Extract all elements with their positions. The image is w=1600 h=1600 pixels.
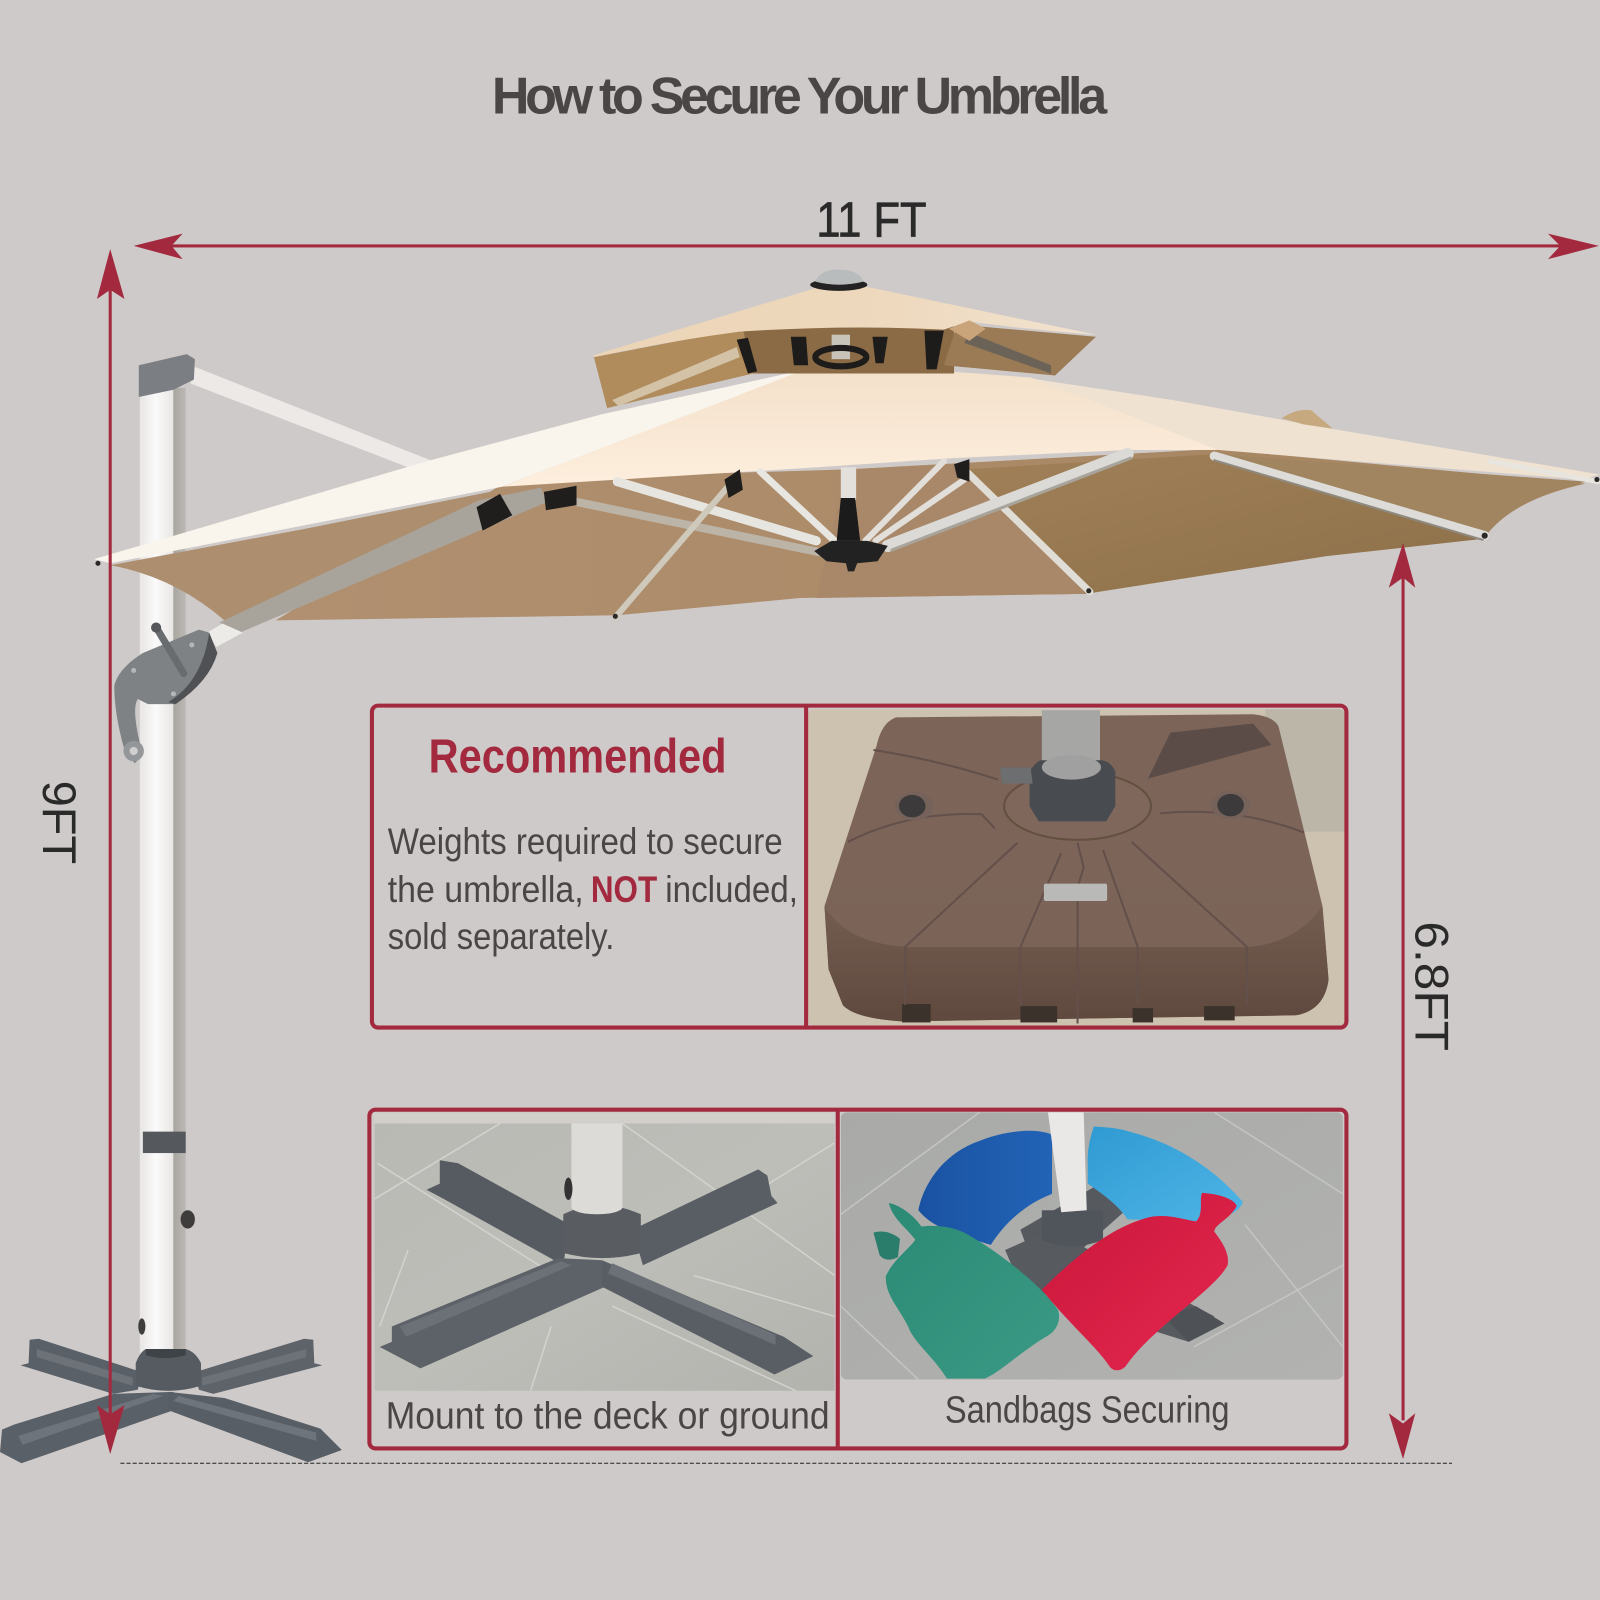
central hub bbox=[814, 467, 888, 571]
dimension: height arrow bbox=[97, 249, 124, 1454]
dimension: clearance arrow bbox=[1389, 543, 1415, 1459]
pole bbox=[140, 388, 186, 1355]
panel outline bbox=[369, 1110, 1346, 1448]
tilt crank gearbox bbox=[114, 622, 217, 763]
label: 9FT: 9FT bbox=[33, 781, 85, 864]
heading: recommended: Recommended bbox=[429, 730, 727, 783]
umbrella illustration bbox=[0, 269, 1600, 1463]
hinges bbox=[477, 459, 969, 531]
support strut bbox=[191, 365, 431, 467]
text: weights note: the umbrella, bbox=[388, 869, 584, 910]
panel: mounting options bbox=[369, 1109, 1346, 1449]
photo: sandbags bbox=[841, 1112, 1343, 1380]
photo: weight base bbox=[808, 709, 1345, 1026]
cross base bbox=[0, 1339, 342, 1463]
top crown bbox=[810, 269, 867, 291]
text: weights note: Weights required to secure bbox=[388, 821, 783, 862]
pole band bbox=[143, 1132, 186, 1153]
text: weights note: sold separately. bbox=[388, 916, 614, 957]
canopy underside bbox=[110, 449, 1586, 620]
title: How to Secure Your Umbrella bbox=[492, 67, 1108, 125]
ribs and stretchers bbox=[567, 454, 1598, 617]
caption: sandbags: Sandbags Securing bbox=[945, 1388, 1230, 1430]
label: 11 FT: 11 FT bbox=[816, 194, 927, 248]
pole knobs bbox=[138, 1210, 195, 1335]
text: weights note: NOT bbox=[591, 869, 658, 910]
panel outline bbox=[372, 706, 1346, 1028]
photo: deck mount bbox=[374, 1113, 835, 1391]
text: weights note bbox=[388, 821, 798, 957]
ground line bbox=[120, 1462, 1452, 1464]
rib tips bbox=[95, 477, 1599, 619]
caption: mount: Mount to the deck or ground bbox=[386, 1395, 830, 1437]
vent handle bbox=[1282, 410, 1333, 429]
upper canopy tier bbox=[594, 287, 1096, 408]
panel: recommended weights bbox=[372, 705, 1346, 1028]
pole top cap bbox=[139, 354, 195, 397]
text: weights note: included, bbox=[665, 869, 798, 910]
label: 6.8FT: 6.8FT bbox=[1405, 921, 1457, 1051]
dimension: width arrow bbox=[134, 234, 1599, 259]
canopy top surface bbox=[94, 364, 1600, 563]
main arm bbox=[219, 488, 547, 633]
